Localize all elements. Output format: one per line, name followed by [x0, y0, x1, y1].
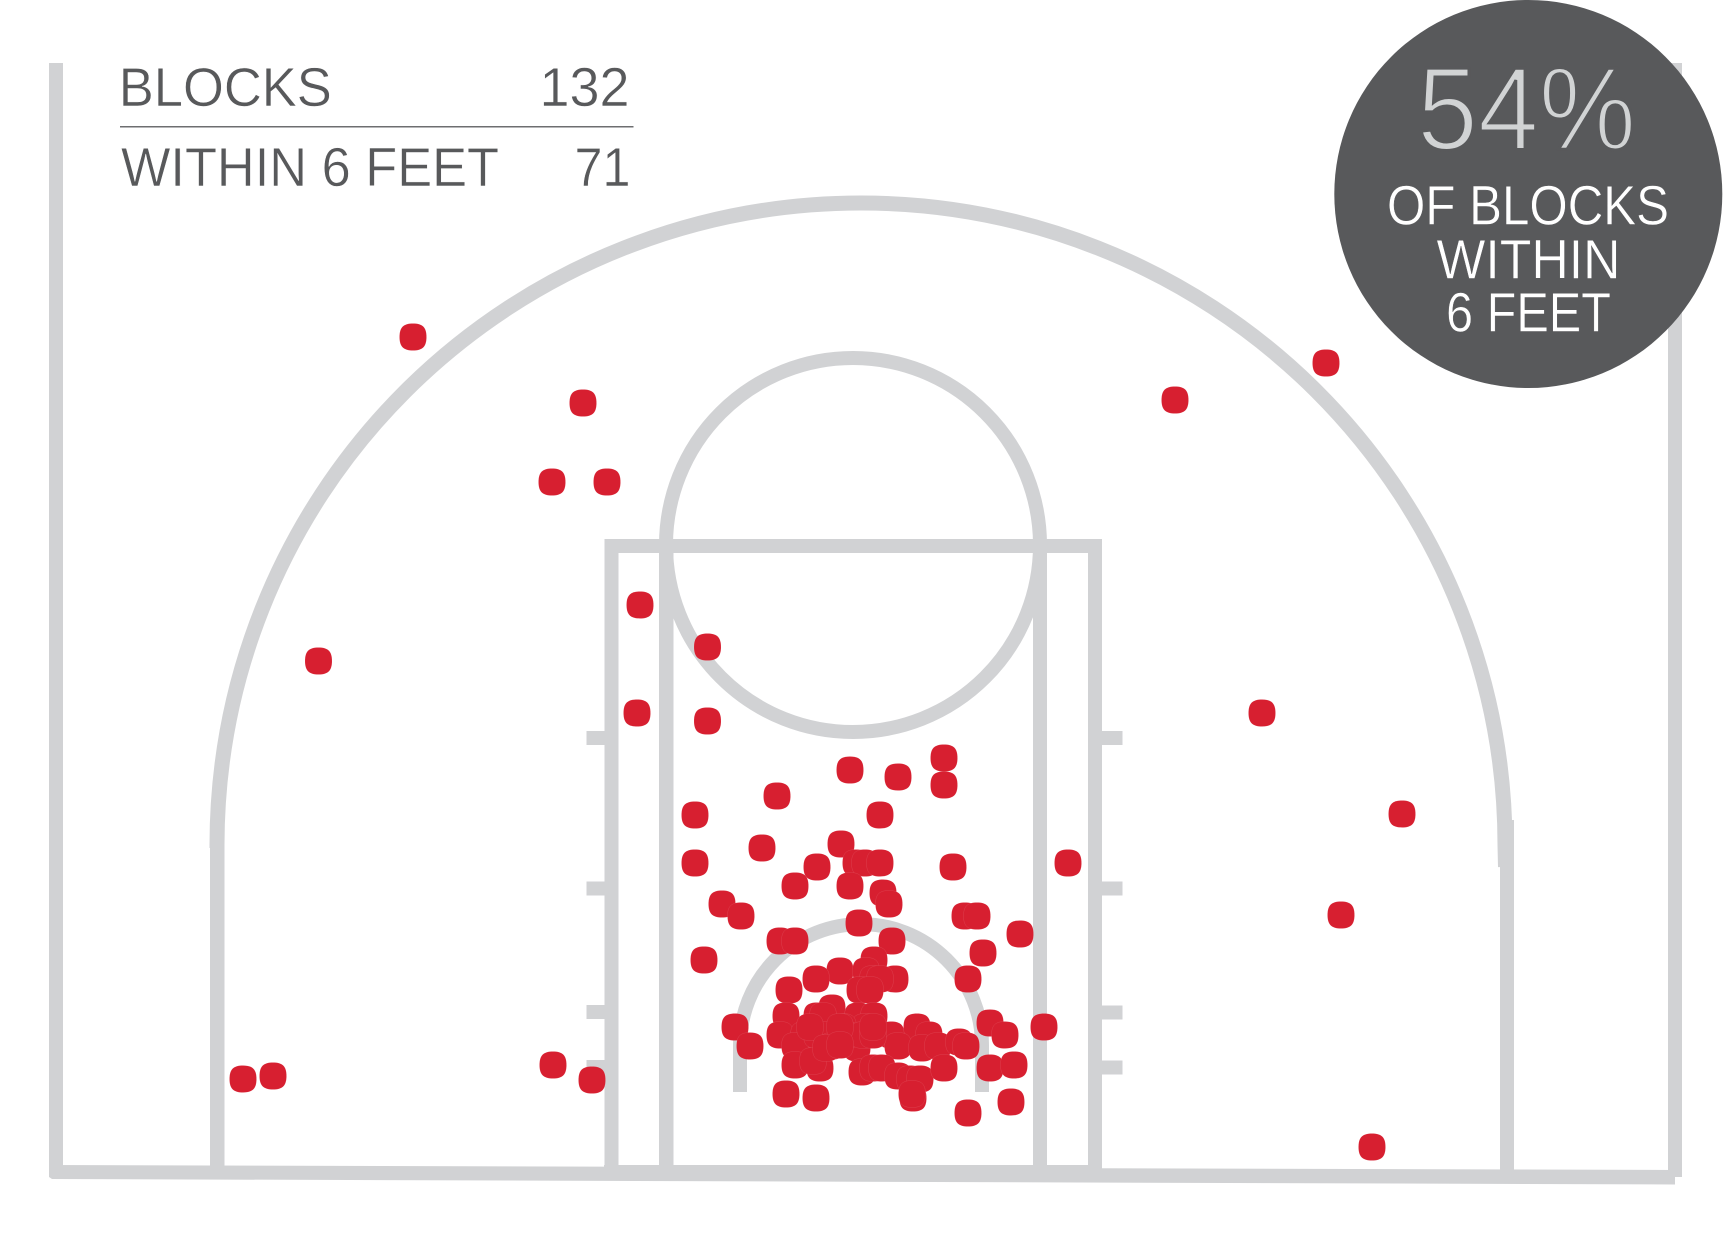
- court baseline: [49, 1165, 1675, 1184]
- callout circle: [1334, 0, 1722, 388]
- value: 132: 132: [540, 56, 630, 118]
- court right sideline: [1668, 63, 1682, 1177]
- lane hash marks: [586, 731, 1122, 1074]
- block location dots: [230, 324, 1416, 1160]
- key / paint: [604, 539, 1102, 1169]
- callout big number: 54%: [1417, 44, 1636, 176]
- callout caption: 6 FEET: [1446, 282, 1611, 344]
- table divider: [120, 126, 634, 128]
- restricted area arc: [740, 924, 982, 1092]
- value: 71: 71: [574, 136, 630, 198]
- court left sideline: [49, 63, 63, 1173]
- label: within 6 feet: WITHIN 6 FEET: [121, 136, 499, 198]
- callout caption: OF BLOCKS: [1387, 174, 1669, 236]
- callout caption: [1387, 174, 1669, 344]
- three point line: [210, 203, 1514, 1170]
- label: blocks: BLOCKS: [119, 56, 332, 118]
- free throw circle: [666, 358, 1040, 732]
- baseline thickening under the key: [604, 1165, 1102, 1175]
- stats table: [119, 56, 634, 198]
- callout caption: WITHIN: [1436, 228, 1620, 290]
